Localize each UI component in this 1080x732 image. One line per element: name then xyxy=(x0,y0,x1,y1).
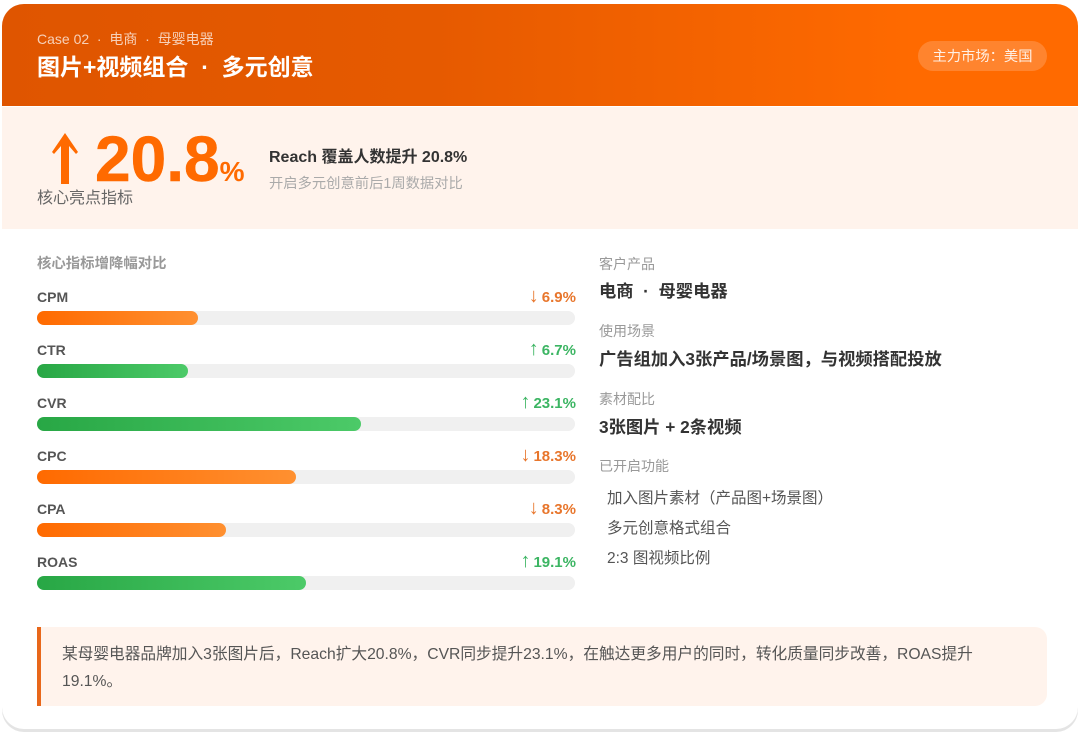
case label: Case 02 · 电商 · 母婴电器 xyxy=(37,31,214,47)
market badge: 主力市场：美国 xyxy=(932,49,1033,65)
bar chart heading: 核心指标增降幅对比 xyxy=(37,256,167,272)
bar: CTR xyxy=(37,338,576,378)
key figure caption: 核心亮点指标 xyxy=(37,190,133,207)
bar: CTR: ↑6.7% xyxy=(529,338,576,360)
value: creative mix: 3张图片 + 2条视频 xyxy=(599,417,742,437)
bar: CPM: CPM xyxy=(37,289,68,305)
callout: summary xyxy=(37,627,1047,706)
label: enabled features: 已开启功能 xyxy=(599,458,669,474)
bar: CPA: CPA xyxy=(37,501,66,517)
bar: CPC: ↓18.3% xyxy=(520,444,576,466)
panel: metric bars xyxy=(37,256,576,590)
market badge xyxy=(918,41,1047,71)
bar: CPC: CPC xyxy=(37,448,67,464)
bar: CPC xyxy=(37,444,576,484)
feature: format mix: 多元创意格式组合 xyxy=(607,520,731,537)
summary text xyxy=(62,645,973,690)
value: scenario: 广告组加入3张产品/场景图，与视频搭配投放 xyxy=(599,349,942,369)
label: scenario: 使用场景 xyxy=(599,323,655,339)
comparison note: 开启多元创意前后1周数据对比 xyxy=(269,176,463,192)
feature: ratio: 2:3 图视频比例 xyxy=(607,550,710,567)
feature: image assets: 加入图片素材（产品图+场景图） xyxy=(607,490,833,507)
label: creative mix: 素材配比 xyxy=(599,391,655,407)
bar: ROAS: ↑19.1% xyxy=(520,550,576,572)
bar: CTR: CTR xyxy=(37,342,66,358)
summary text: 某母婴电器品牌加入3张图片后，Reach扩大20.8%，CVR同步提升23.1%，在触达更多用户的同时，转化质量同步改善，ROAS提升 xyxy=(62,646,973,663)
key figure: 20.8% xyxy=(95,123,244,195)
panel: campaign details xyxy=(599,256,942,567)
bar: CVR: ↑23.1% xyxy=(520,391,576,413)
bar: CVR xyxy=(37,391,576,431)
bar: CPA: ↓8.3% xyxy=(529,497,576,519)
bar: CPA xyxy=(37,497,576,537)
header banner xyxy=(2,4,1078,106)
bar: ROAS xyxy=(37,550,576,590)
bar: CPM xyxy=(37,285,576,325)
value: product: 电商 · 母婴电器 xyxy=(599,281,728,301)
bar: ROAS: ROAS xyxy=(37,554,77,570)
summary text: 19.1%。 xyxy=(62,673,122,690)
headline metric: Reach 覆盖人数提升 20.8% xyxy=(269,149,467,166)
main title: 图片+视频组合 · 多元创意 xyxy=(37,54,314,80)
hero panel xyxy=(2,107,1078,229)
bar: CVR: CVR xyxy=(37,395,67,411)
label: product: 客户产品 xyxy=(599,256,655,272)
icon: up arrow xyxy=(52,133,78,184)
bar: CPM: ↓6.9% xyxy=(529,285,576,307)
